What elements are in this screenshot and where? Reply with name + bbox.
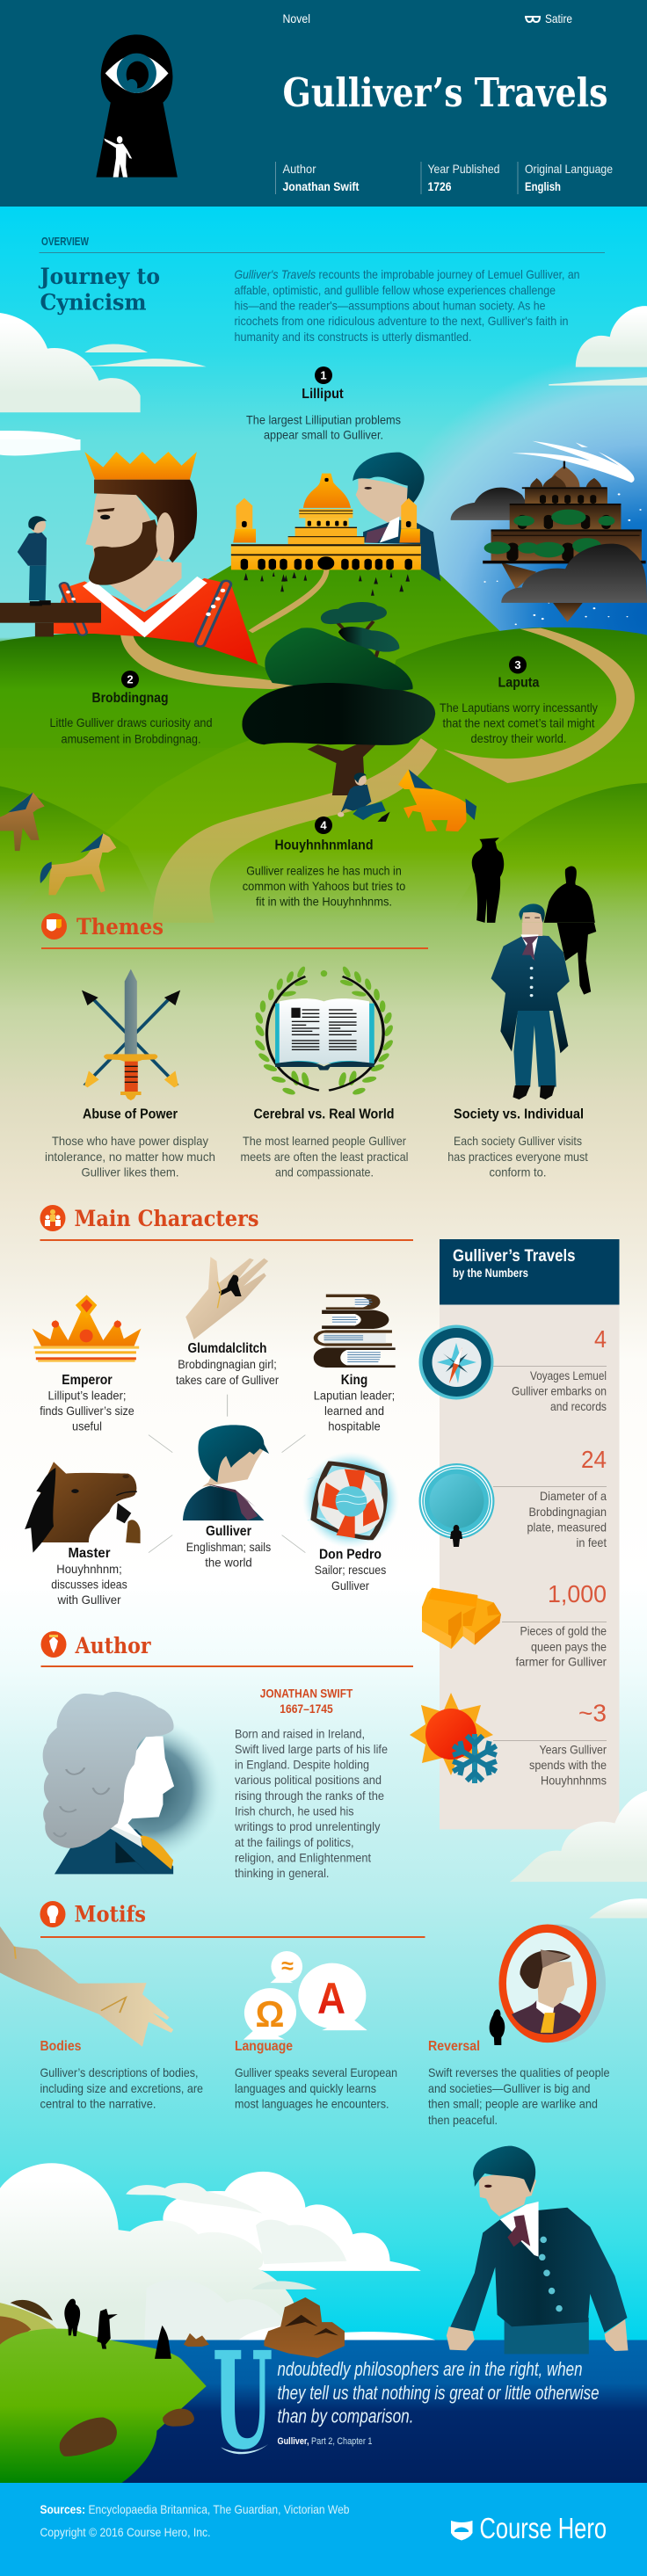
horse: tan (40, 833, 116, 895)
icon: gold bars (422, 1588, 501, 1649)
motif: reversal (428, 2039, 610, 2127)
icon: sun and snowflake (410, 1693, 494, 1781)
location 4: houyhnhnmland (243, 816, 405, 909)
stat: voyages: Gulliver embarks on (512, 1383, 607, 1397)
author bio: Swift lived large parts of his life (235, 1742, 388, 1756)
theme: cerebral vs. real world: Cerebral vs. Real World (253, 1107, 394, 1121)
metadata: year published: Year Published (427, 162, 499, 176)
stat: plate diameter: 24 (581, 1446, 607, 1473)
overview text: affable, optimistic, and gullible fellow whose experiences challenge (234, 283, 556, 297)
overview text: Gulliver's Travels recounts the improbable journey of Lemuel Gulliver, an (234, 267, 580, 281)
location 2: brobdingnag: 2 (127, 673, 134, 686)
section: themes heading (41, 913, 428, 949)
theme: abuse of power (45, 1107, 215, 1179)
character: king: King (341, 1373, 367, 1388)
metadata: author: Jonathan Swift (283, 179, 360, 193)
icon: emperor crown (33, 1295, 142, 1362)
overview text: his—and the reader's—assumptions about human society. As he (234, 299, 546, 313)
silhouette: small figure at mirror (490, 2009, 505, 2045)
stat: plate diameter: in feet (577, 1535, 607, 1549)
character: king: hospitable (328, 1419, 381, 1433)
theme: society vs. individual (447, 1107, 588, 1179)
quote drop cap: U (213, 2324, 273, 2478)
stat: voyages: Voyages Lemuel (530, 1368, 607, 1382)
small gulliver on plank (0, 516, 101, 636)
metadata: author: Author (283, 162, 316, 176)
characters illustrations (25, 1257, 399, 1553)
icon: stack of books (314, 1295, 396, 1368)
panel: by the numbers: Gulliver’s Travels (453, 1247, 575, 1266)
stat: years with houyhnhnms: spends with the (529, 1758, 607, 1772)
lower left hill (0, 787, 165, 923)
metadata: original language (517, 162, 613, 194)
location 4: houyhnhnmland: Gulliver realizes he has much in (246, 863, 402, 877)
genre: novel: Novel (283, 11, 310, 25)
icon: plate with figure (418, 1463, 494, 1547)
location 3: laputa: that the next comet’s tail might (443, 715, 595, 729)
author bio (234, 1686, 388, 1880)
author bio: Born and raised in Ireland, (235, 1726, 365, 1740)
character: don pedro: Don Pedro (319, 1547, 382, 1563)
left hill (0, 633, 314, 748)
icon: lifebuoy (302, 1452, 399, 1549)
character: glumdalclitch: Brobdingnagian girl; (178, 1357, 277, 1371)
motif: bodies: including size and excretions, are (40, 2081, 203, 2095)
motif: reversal: then small; people are warlike and (428, 2097, 598, 2111)
section: themes heading: Themes (76, 914, 164, 940)
horse: brown (0, 793, 45, 851)
author bio: at the failings of politics, (235, 1835, 353, 1849)
character: gulliver (186, 1524, 271, 1570)
overview heading: Cynicism (40, 290, 146, 315)
right hill (355, 628, 647, 794)
location 2: brobdingnag: Little Gulliver draws curiosity and (49, 715, 213, 729)
location 3: laputa: Laputa (498, 675, 540, 691)
palace (231, 474, 421, 570)
theme: abuse of power: intolerance, no matter how much (45, 1150, 215, 1164)
clouds: upper sky (0, 306, 647, 439)
section: author heading (40, 1631, 413, 1667)
king of brobdingnag (54, 452, 258, 664)
location 2: brobdingnag: amusement in Brobdingnag. (62, 731, 200, 745)
character: master: Master (69, 1546, 111, 1561)
character: master (51, 1546, 127, 1607)
author bio: various political positions and (235, 1773, 382, 1787)
mountain (124, 564, 545, 693)
middle hill (0, 736, 647, 923)
illustrations: author and motifs (0, 1692, 647, 2047)
theme: cerebral vs. real world (241, 1107, 408, 1179)
location 1: lilliput: 1 (320, 369, 327, 381)
metadata: original language: Original Language (525, 162, 613, 176)
overview text (234, 267, 580, 344)
metadata: year published: 1726 (427, 179, 452, 193)
motif: language: most languages he encounters. (235, 2097, 389, 2111)
icon: compass (418, 1325, 494, 1399)
motif: bodies: central to the narrative. (40, 2097, 156, 2111)
stat: years with houyhnhnms: ~3 (578, 1700, 607, 1726)
stat: voyages (493, 1325, 607, 1413)
location 3: laputa: destroy their world. (471, 731, 566, 745)
stat: plate diameter: plate, measured (527, 1520, 607, 1535)
character: master: discusses ideas (51, 1577, 127, 1591)
location 4: houyhnhnmland: Houyhnhnmland (274, 838, 373, 853)
stat: pieces of gold (502, 1580, 607, 1668)
icon: glasses (525, 17, 541, 22)
character: glumdalclitch: takes care of Gulliver (176, 1373, 279, 1387)
silhouette: hatted figure (472, 838, 504, 923)
lower right hill (446, 783, 647, 923)
scene: journey map (0, 439, 647, 923)
location 3: laputa (440, 656, 598, 745)
section: main characters heading (40, 1205, 413, 1241)
overview heading (39, 264, 160, 315)
overview heading: Journey to (39, 264, 160, 289)
stars (483, 493, 642, 625)
scene: sea and shore (0, 2146, 647, 2483)
location 4: houyhnhnmland: 4 (320, 819, 327, 831)
character: emperor: Emperor (62, 1373, 113, 1388)
stat: plate diameter: Diameter of a (540, 1489, 607, 1503)
motif: reversal: and societies—Gulliver is big and (428, 2081, 591, 2095)
section: motifs heading (40, 1901, 425, 1938)
logo: course hero: Course Hero (480, 2512, 607, 2544)
theme: abuse of power: Abuse of Power (83, 1107, 178, 1121)
quote: than by comparison. (278, 2405, 413, 2427)
author bio: JONATHAN SWIFT (260, 1686, 353, 1700)
theme: abuse of power: Gulliver likes them. (81, 1165, 179, 1179)
section: author heading: Author (75, 1633, 151, 1658)
author bio: rising through the ranks of the (235, 1789, 384, 1803)
overview text: humanity and its constructs is utterly dismantled. (234, 330, 471, 344)
theme: society vs. individual: Each society Gulliver visits (454, 1134, 582, 1148)
section: main characters heading: Main Characters (74, 1206, 258, 1231)
logo: course hero (451, 2512, 607, 2544)
icon: mirror with man (499, 1924, 606, 2043)
overview text: ricochets from one ridiculous adventure to the next, Gulliver's faith in (234, 314, 568, 328)
theme illustrations (82, 923, 596, 1100)
character: gulliver: Gulliver (206, 1524, 251, 1539)
bubble letters: ≈ (281, 1954, 294, 1978)
panel: by the numbers: by the Numbers (453, 1266, 528, 1280)
drop cap swash (221, 2444, 268, 2454)
stat: voyages: and records (550, 1399, 607, 1413)
author bio: 1667–1745 (280, 1702, 333, 1716)
clouds right (510, 1791, 647, 1882)
overview label: OVERVIEW (41, 235, 90, 248)
sitting gulliver (338, 773, 390, 822)
author bio: religion, and Enlightenment (235, 1851, 371, 1865)
author bio: thinking in general. (235, 1866, 329, 1880)
silhouettes on shore (64, 2299, 171, 2359)
location 4: houyhnhnmland: fit in with the Houyhnhnms. (256, 895, 392, 909)
gulliver behind palace (353, 453, 440, 581)
laputa comet (512, 441, 635, 483)
character: emperor: useful (72, 1419, 102, 1433)
bubble letters: A (317, 1974, 345, 2023)
island (0, 2300, 207, 2483)
author bio: writings to prod unrelentingly (234, 1819, 380, 1833)
motif: language: Gulliver speaks several European (235, 2065, 397, 2079)
motif: language: Language (235, 2039, 293, 2054)
connector lines (149, 1395, 305, 1553)
icon: sword and arrows (82, 969, 180, 1100)
bubble letters (255, 1954, 345, 2035)
motif: reversal: Swift reverses the qualities of people (428, 2065, 610, 2079)
author bio: in England. Despite holding (235, 1758, 369, 1772)
character: emperor: Lilliput’s leader; (47, 1389, 127, 1403)
stat: pieces of gold: 1,000 (548, 1580, 607, 1607)
footer (0, 2483, 647, 2576)
night sky glow (264, 343, 647, 646)
motif: bodies (40, 2039, 203, 2111)
central tree (242, 602, 435, 795)
clouds (0, 2163, 435, 2340)
motif: reversal: Reversal (428, 2039, 480, 2054)
stat: pieces of gold: Pieces of gold the (520, 1624, 607, 1638)
sea (0, 2340, 647, 2483)
quote attribution: Gulliver, Part 2, Chapter 1 (278, 2436, 373, 2447)
swift portrait (43, 1692, 221, 1874)
stat: pieces of gold: farmer for Gulliver (515, 1654, 607, 1668)
metadata: year published (420, 162, 499, 194)
motif: reversal: then peaceful. (428, 2113, 498, 2127)
silhouette: tall figure (544, 866, 595, 923)
stat: years with houyhnhnms: Houyhnhnms (541, 1774, 607, 1788)
character: king (314, 1373, 395, 1433)
header band (0, 0, 647, 207)
motif: bodies: Gulliver’s descriptions of bodies, (40, 2065, 199, 2079)
character: king: Laputian leader; (314, 1389, 395, 1403)
character: glumdalclitch: Glumdalclitch (188, 1341, 267, 1356)
stat: plate diameter (493, 1446, 607, 1549)
theme: society vs. individual: has practices everyone must (447, 1150, 588, 1164)
gulliver standing (491, 923, 570, 1099)
location 3: laputa: The Laputians worry incessantly (440, 700, 598, 715)
theme: abuse of power: Those who have power display (52, 1134, 208, 1148)
stat: years with houyhnhnms: Years Gulliver (540, 1742, 607, 1756)
rocks (184, 2297, 345, 2358)
author bio: Irish church, he used his (235, 1803, 353, 1818)
lilliputians (244, 572, 410, 596)
theme: cerebral vs. real world: The most learned people Gulliver (243, 1134, 406, 1148)
theme: society vs. individual: conform to. (489, 1165, 547, 1179)
stat: years with houyhnhnms (493, 1700, 607, 1788)
panel: by the numbers (440, 1239, 619, 1830)
location 3: laputa: 3 (514, 658, 521, 671)
horse: orange houyhnhnm (398, 769, 476, 831)
character: don pedro: Sailor; rescues (315, 1563, 386, 1577)
big gulliver head (519, 903, 545, 923)
location 4: houyhnhnmland: common with Yahoos but tries to (243, 879, 405, 893)
silhouette: tall figure legs (557, 923, 596, 995)
character: don pedro (315, 1547, 386, 1593)
motif: language (235, 2039, 397, 2111)
section: motifs heading: Motifs (74, 1902, 146, 1927)
motif: language: languages and quickly learns (235, 2081, 376, 2095)
character: don pedro: Gulliver (331, 1578, 369, 1593)
genre: satire: Satire (545, 11, 572, 25)
metadata: original language: English (525, 179, 561, 193)
stat: voyages: 4 (594, 1325, 607, 1353)
character: master: Houyhnhnm; (56, 1562, 122, 1576)
character: glumdalclitch (176, 1341, 279, 1387)
character: gulliver: Englishman; sails (186, 1540, 271, 1554)
stat: plate diameter: Brobdingnagian (529, 1505, 607, 1519)
character: emperor (40, 1373, 134, 1433)
theme: cerebral vs. real world: meets are often the least practical (241, 1150, 408, 1164)
stat: pieces of gold: queen pays the (531, 1640, 607, 1654)
location 1: lilliput (246, 366, 401, 441)
gulliver wading (447, 2146, 628, 2354)
icon: hand for bodies (0, 1927, 173, 2047)
laputa floating island (451, 461, 647, 622)
location 2: brobdingnag (49, 671, 213, 745)
icon: glumdalclitch hand (185, 1257, 268, 1339)
copyright: Copyright © 2016 Course Hero, Inc. (40, 2525, 211, 2539)
character: emperor: finds Gulliver’s size (40, 1404, 134, 1418)
icon: open book in laurel (253, 966, 395, 1096)
roads (120, 570, 635, 923)
icon: keyhole with eye (96, 34, 178, 178)
icon: speech bubbles (244, 1951, 367, 2040)
character: gulliver: the world (205, 1556, 252, 1570)
metadata: author (275, 162, 360, 194)
location 1: lilliput: The largest Lilliputian problems (246, 413, 401, 427)
theme: society vs. individual: Society vs. Individual (454, 1107, 584, 1121)
location 1: lilliput: appear small to Gulliver. (264, 427, 383, 441)
character: king: learned and (324, 1404, 384, 1418)
motif: bodies: Bodies (40, 2039, 82, 2054)
quote (278, 2358, 600, 2427)
sources: Sources: Encyclopaedia Britannica, The Guardian, Victorian Web (40, 2502, 350, 2516)
cloud upper right (589, 1898, 647, 1918)
location 1: lilliput: Lilliput (302, 387, 344, 402)
theme: cerebral vs. real world: and compassionate. (275, 1165, 374, 1179)
icon: master horse (25, 1462, 141, 1553)
character: master: with Gulliver (57, 1593, 121, 1607)
icon: gulliver bust (183, 1425, 269, 1520)
location 2: brobdingnag: Brobdingnag (91, 691, 169, 706)
bubble letters: Ω (255, 1993, 285, 2035)
